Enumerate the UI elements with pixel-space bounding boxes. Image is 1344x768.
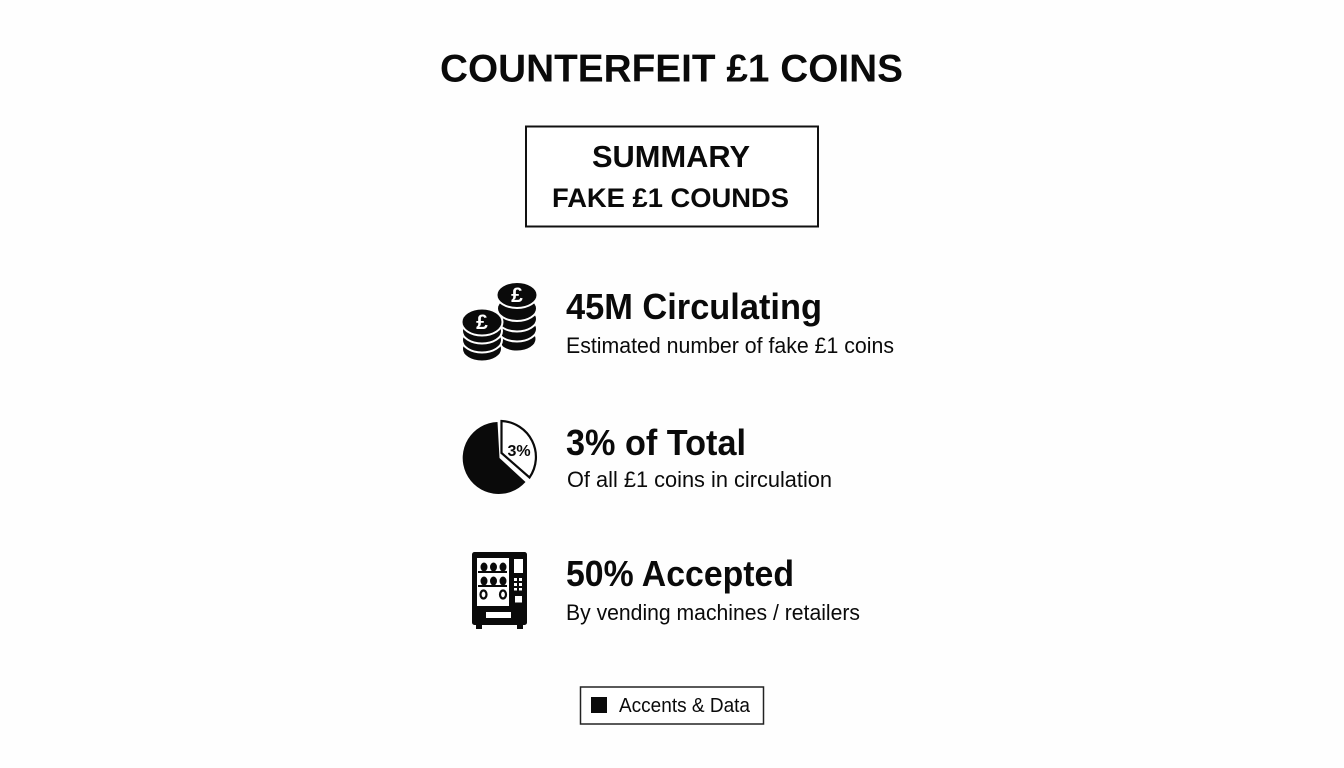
title: COUNTERFEIT £1 COINS (440, 48, 903, 90)
stat 2 description: Of all £1 coins in circulation (567, 467, 832, 492)
icon: pie chart 3%: 3% (507, 443, 531, 460)
icon: pie chart 3% (463, 421, 536, 494)
summary heading: SUMMARY (592, 139, 750, 174)
stat 3 description: By vending machines / retailers (566, 600, 860, 625)
icon: coin stacks: £ (511, 284, 523, 307)
icon: coin stacks: £ (476, 311, 488, 334)
legend (580, 687, 764, 724)
legend label: Accents & Data (619, 695, 751, 717)
icon: coin stacks (462, 282, 538, 362)
stat 1 description: Estimated number of fake £1 coins (566, 333, 894, 358)
summary box (526, 126, 818, 226)
stat 1 heading: 45M Circulating (566, 286, 822, 327)
legend swatch (591, 697, 607, 713)
stat 2 heading: 3% of Total (566, 422, 746, 463)
stat 3 heading: 50% Accepted (566, 553, 794, 594)
summary subheading: FAKE £1 COUNDS (552, 183, 789, 213)
icon: vending machine (472, 552, 527, 629)
